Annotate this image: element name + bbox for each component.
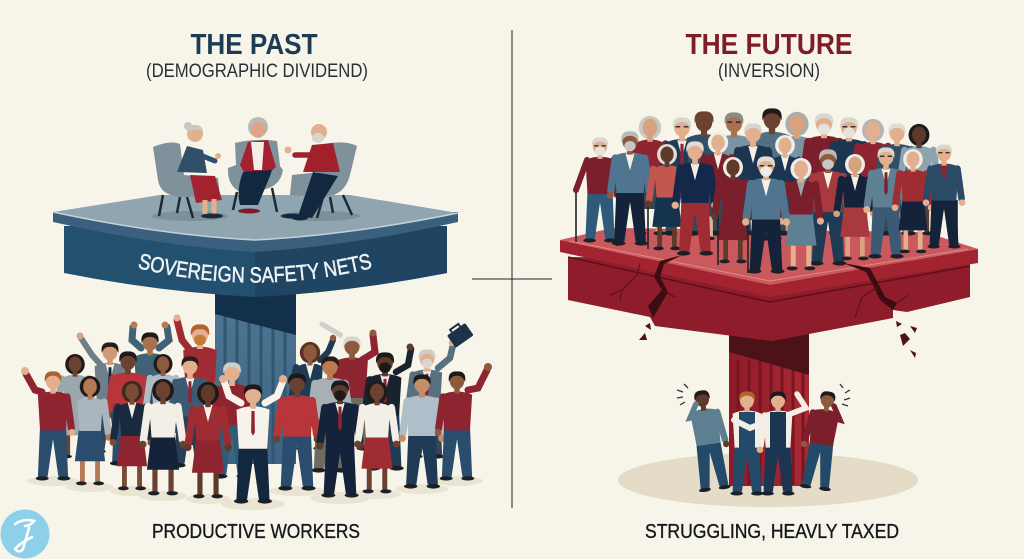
- crack: right: [843, 263, 897, 310]
- caption: productive workers: PRODUCTIVE WORKERS: [152, 521, 360, 543]
- worker: black suit man: [316, 380, 364, 498]
- worker: dark suit bearded man: [361, 344, 414, 471]
- worker: grey blue woman: [142, 354, 184, 455]
- title: the past: THE PAST: [190, 29, 318, 61]
- worker: red sweater man: [273, 373, 321, 491]
- worker: grey shirt man: [306, 356, 354, 473]
- second row burgundy woman: [696, 132, 740, 240]
- falling debris: [639, 321, 917, 358]
- crack: left: [648, 255, 682, 318]
- worker: white blouse woman: [139, 379, 187, 495]
- back elder man grey: [714, 112, 754, 236]
- worker: older man grey suit: [405, 340, 455, 459]
- left pillar: [215, 290, 296, 464]
- front elder: burgundy dress woman: [711, 157, 755, 265]
- stress marks right: [840, 384, 850, 406]
- back elder dark woman: [896, 124, 942, 235]
- stress marks left: [677, 384, 688, 405]
- worker ground shadows: [27, 476, 483, 510]
- front elder: burgundy cardigan woman: [778, 158, 824, 270]
- seated elders group: [152, 117, 360, 221]
- title: the future: THE FUTURE: [686, 29, 852, 61]
- subtitle: inversion: (INVERSION): [718, 61, 820, 82]
- worker: burgundy sweater: [795, 389, 844, 492]
- elder woman in left chair: [152, 122, 228, 221]
- front elder: coral woman: [645, 144, 689, 250]
- platform label: SOVEREIGN SAFETY NETS: [138, 254, 372, 283]
- front elder: center grey cardigan man with cane: [742, 156, 790, 274]
- worker: center man in white shirt: [219, 375, 287, 504]
- left platform: sovereign safety nets: [53, 195, 458, 297]
- worker: red overalls woman: [354, 381, 400, 493]
- front elder: navy jacket with cane: [923, 144, 965, 249]
- future elders crowd: [576, 108, 965, 274]
- caption: struggling, heavily taxed: STRUGGLING, HEAVLY TAXED: [645, 521, 899, 543]
- worker: arms crossed, overalls: [731, 391, 763, 496]
- logo badge: [0, 510, 50, 558]
- back elder woman: [626, 116, 674, 235]
- back worker: dark blazer woman: [288, 321, 344, 450]
- back worker: grey suit man: [76, 332, 133, 454]
- subtitle: demographic dividend: (DEMOGRAPHIC DIVIDEND): [146, 61, 368, 82]
- elder woman in middle chair: [228, 117, 283, 214]
- back elder bearded man: [799, 113, 849, 236]
- front elder: red sweater: [804, 149, 852, 266]
- back worker: red man: [174, 314, 219, 446]
- back worker: teal shirt arms up: [130, 322, 169, 446]
- front elder: navy blazer woman: [833, 154, 877, 260]
- worker: red shirt: [105, 351, 151, 466]
- second row navy man: [729, 123, 777, 241]
- back worker: grey woman: [54, 354, 96, 458]
- back elder man glasses: [658, 117, 706, 236]
- worker: right burgundy man: [435, 363, 492, 481]
- front elder: teal sweater: [607, 131, 653, 246]
- back elder white hair: [874, 123, 920, 236]
- elder man in right chair: [280, 124, 360, 221]
- icon: briefcase: [445, 320, 474, 348]
- worker: red blazer woman: [184, 382, 232, 498]
- struggling workers: [677, 384, 850, 496]
- worker: left burgundy sweater man: [21, 367, 75, 481]
- worker: silver hair woman: [208, 362, 256, 479]
- front elder: grey suit man: [863, 147, 909, 259]
- back elder dark younger man: [752, 108, 792, 236]
- front elder: navy sweater red trousers: [672, 141, 718, 256]
- worker: dark jacket woman: [110, 381, 154, 490]
- back elder navy man: [825, 117, 873, 236]
- productive workers crowd: [21, 314, 492, 504]
- front elder: burgundy sweater with cane: [576, 137, 617, 243]
- worker: hand on head, slate shirt: [685, 388, 736, 493]
- back elder woman grey: [780, 112, 814, 235]
- right ground ellipse: [618, 453, 918, 507]
- right pillar: [729, 330, 809, 486]
- back elder red woman: [849, 119, 897, 235]
- worker: tablet man: [399, 374, 445, 489]
- right platform: cracked: [560, 228, 978, 358]
- central divider cross: [472, 30, 552, 508]
- worker: hand on head, navy overalls: [757, 391, 806, 496]
- worker: blue suit man: [167, 356, 213, 468]
- second row navy woman: [763, 135, 807, 240]
- worker: walking woman: [75, 376, 112, 485]
- back worker: burgundy man: [329, 330, 376, 451]
- front elder: red cardigan woman: [892, 149, 934, 253]
- back elder dark man: [684, 111, 724, 236]
